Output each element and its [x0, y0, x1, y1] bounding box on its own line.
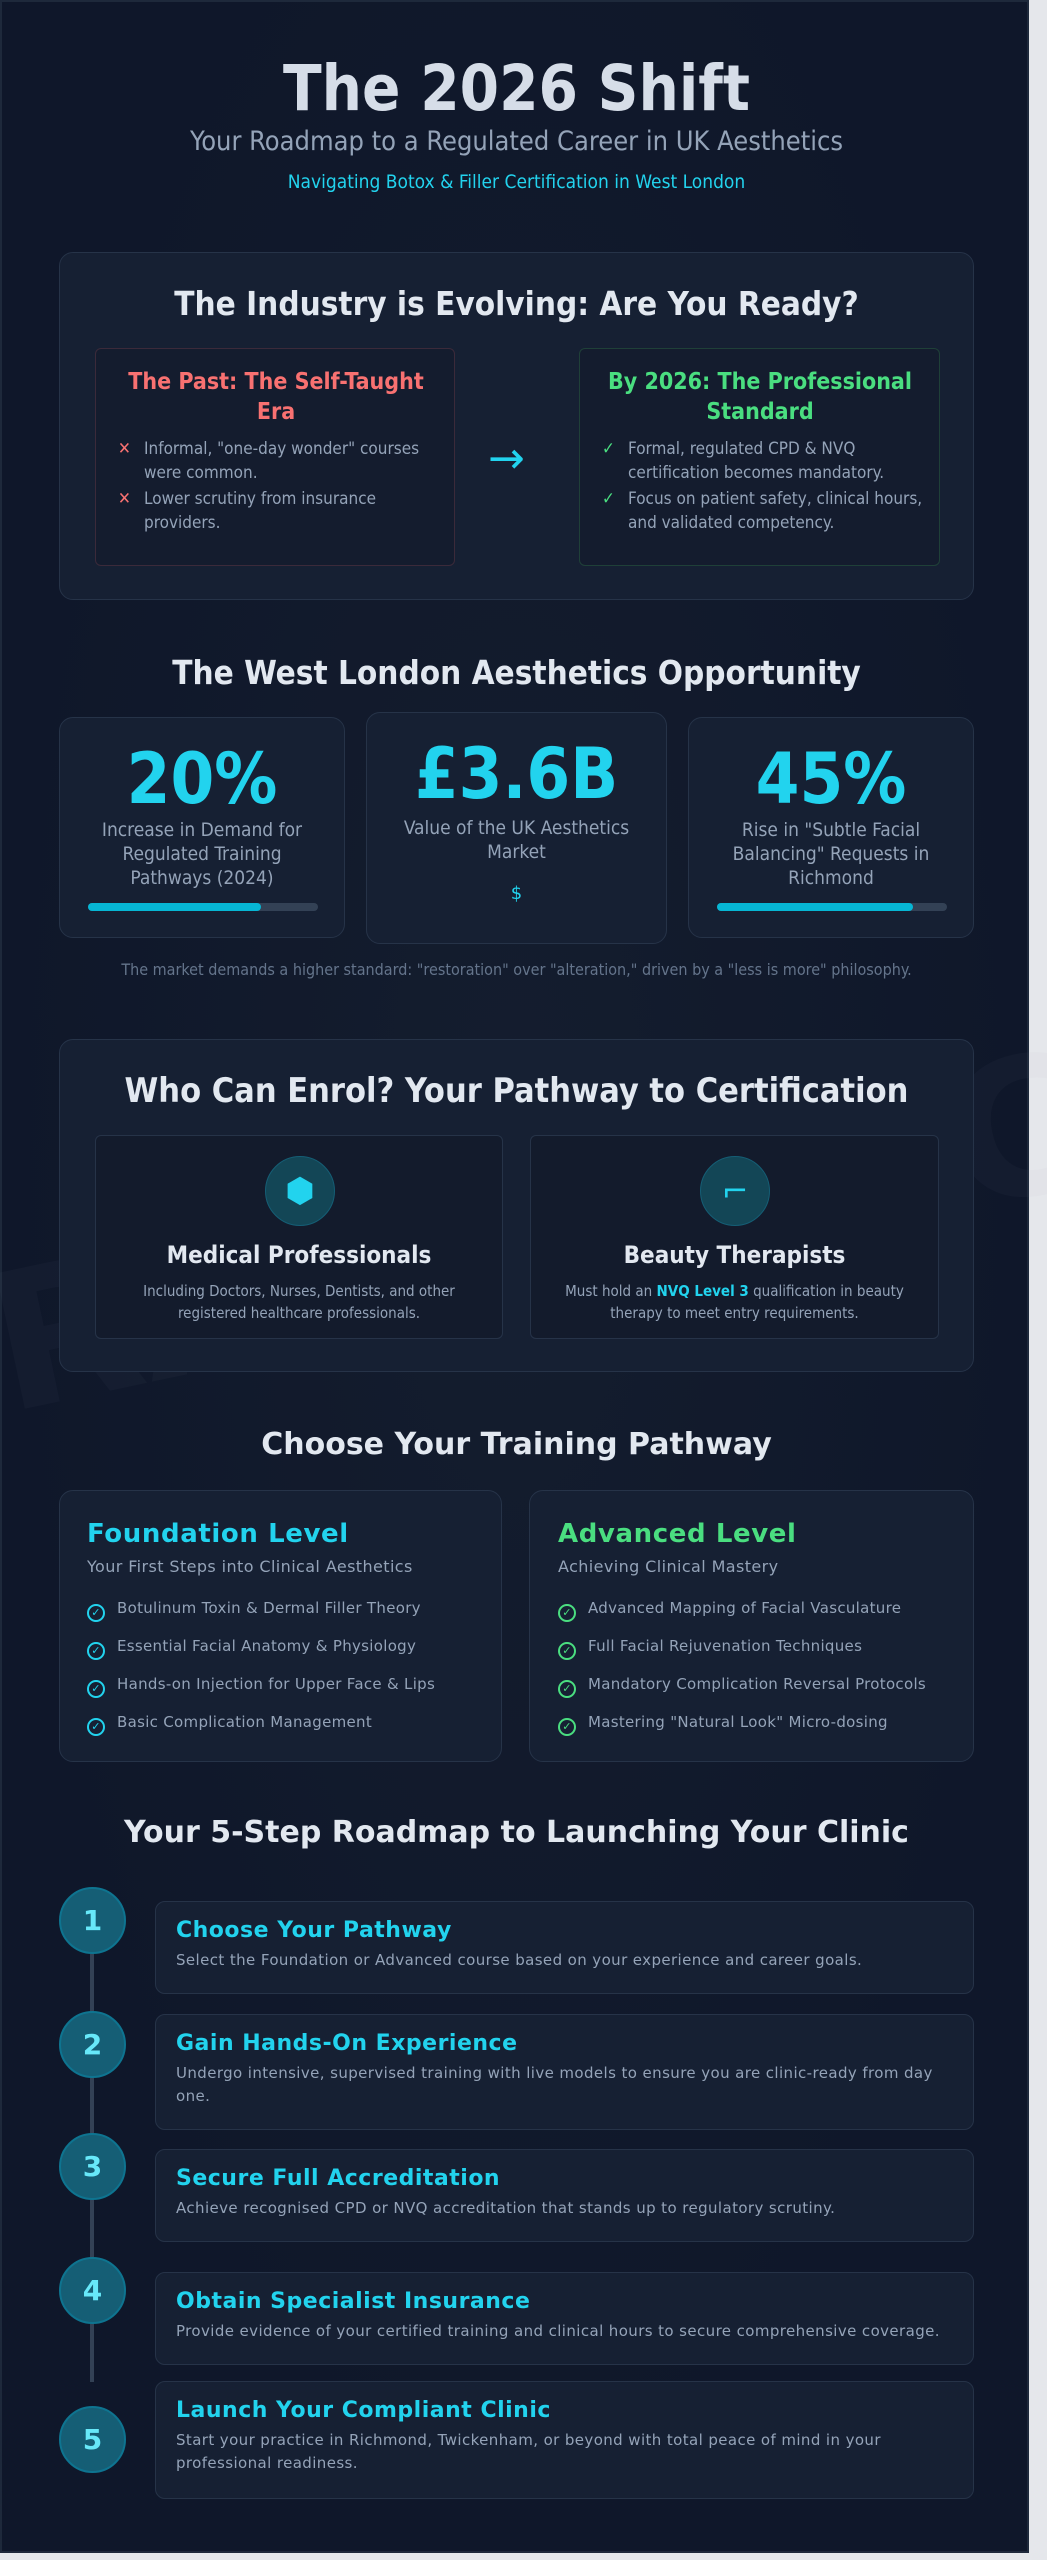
2026 box: Formal, regulated CPD & NVQ certification becomes mandatory. — [628, 439, 884, 483]
text: Gain Hands-On Experience — [176, 2031, 518, 2056]
card advanced: Full Facial Rejuvenation Techniques — [588, 1637, 862, 1655]
stat card 45%: Rise in "Subtle Facial Balancing" Requests in Richmond — [733, 819, 929, 889]
title: The 2026 Shift — [283, 52, 750, 125]
icon: ⬢ — [285, 1171, 315, 1211]
card advanced: Achieving Clinical Mastery — [558, 1557, 778, 1576]
card foundation: ✓ — [91, 1606, 101, 1619]
step 4 — [59, 2257, 126, 2324]
card foundation: ✓ — [91, 1682, 101, 1695]
panel: who can enrol — [59, 1039, 974, 1372]
text: Undergo intensive, supervised training with live models to ensure you are clinic-ready from day one. — [176, 2064, 933, 2105]
2026 box — [579, 348, 940, 566]
panel: industry evolving — [59, 252, 974, 600]
card advanced: ✓ — [562, 1606, 572, 1619]
heading: The Industry is Evolving: Are You Ready? — [174, 284, 859, 323]
past box: ✕ — [118, 489, 131, 509]
step 3: 3 — [83, 2150, 102, 2183]
2026 box: ✓ — [602, 439, 615, 459]
stat card 20% — [59, 717, 345, 938]
card advanced: Mandatory Complication Reversal Protocols — [588, 1675, 926, 1693]
icon — [265, 1156, 335, 1226]
arrow: → — [488, 433, 525, 484]
heading: roadmap: Your 5-Step Roadmap to Launching Your Clinic — [124, 1815, 909, 1850]
icon: ⌐ — [722, 1172, 748, 1210]
card advanced: Mastering "Natural Look" Micro-dosing — [588, 1713, 888, 1731]
card foundation: Botulinum Toxin & Dermal Filler Theory — [117, 1599, 421, 1617]
card medical: Including Doctors, Nurses, Dentists, and other registered healthcare professionals. — [143, 1282, 455, 1322]
step 2 — [59, 2011, 126, 2078]
subtitle: Your Roadmap to a Regulated Career in UK Aesthetics — [190, 126, 843, 157]
card medical — [95, 1135, 503, 1339]
step 1 — [59, 1887, 126, 1954]
card foundation: ✓ — [91, 1644, 101, 1657]
stat card 3.6B: Value of the UK Aesthetics Market — [404, 817, 629, 863]
icon: dollar: $ — [511, 883, 522, 904]
heading: pathway: Choose Your Training Pathway — [261, 1427, 772, 1462]
stat card 20%: Increase in Demand for Regulated Training Pathways (2024) — [102, 819, 302, 889]
past box: The Past: The Self-Taught Era — [128, 369, 424, 425]
past box: Informal, "one-day wonder" courses were common. — [144, 439, 419, 483]
step 3 — [59, 2133, 126, 2200]
2026 box: ✓ — [602, 489, 615, 509]
tagline: Navigating Botox & Filler Certification in West London — [288, 171, 745, 193]
heading: Who Can Enrol? Your Pathway to Certification — [125, 1071, 908, 1111]
card beauty — [530, 1135, 939, 1339]
step 4: 4 — [83, 2274, 102, 2307]
step 1: 1 — [83, 1904, 102, 1937]
text: Choose Your Pathway — [176, 1918, 452, 1943]
card beauty: Must hold an NVQ Level 3 qualification in beauty therapy to meet entry requirements. — [565, 1282, 904, 1322]
text: Select the Foundation or Advanced course based on your experience and career goals. — [176, 1951, 862, 1969]
text: Secure Full Accreditation — [176, 2166, 500, 2191]
text: Provide evidence of your certified training and clinical hours to secure comprehensive coverage. — [176, 2322, 940, 2340]
card foundation — [59, 1490, 502, 1762]
stat card 3.6B: £3.6B — [415, 733, 618, 815]
heading: opportunity: The West London Aesthetics Opportunity — [172, 653, 861, 692]
text: Obtain Specialist Insurance — [176, 2289, 530, 2314]
text: Launch Your Compliant Clinic — [176, 2398, 551, 2423]
card foundation: Essential Facial Anatomy & Physiology — [117, 1637, 416, 1655]
timeline line — [90, 1922, 94, 2382]
card advanced: ✓ — [562, 1644, 572, 1657]
note: The market demands a higher standard: "restoration" over "alteration," driven by a "less is more" philosophy. — [121, 960, 912, 979]
stat card 20%: 20% — [127, 738, 277, 820]
card foundation: ✓ — [91, 1720, 101, 1733]
stat card 45%: 45% — [756, 738, 906, 820]
2026 box: By 2026: The Professional Standard — [608, 369, 912, 425]
card foundation: Foundation Level — [87, 1519, 349, 1549]
past box — [95, 348, 455, 566]
stat card 3.6B — [366, 712, 667, 944]
card advanced: Advanced Mapping of Facial Vasculature — [588, 1599, 901, 1617]
card advanced: ✓ — [562, 1682, 572, 1695]
card beauty: Beauty Therapists — [624, 1241, 845, 1269]
text: Start your practice in Richmond, Twickenham, or beyond with total peace of mind in your professional readiness. — [176, 2431, 881, 2472]
card advanced: ✓ — [562, 1720, 572, 1733]
card advanced: Advanced Level — [558, 1519, 797, 1549]
card medical: Medical Professionals — [167, 1241, 431, 1269]
past box: ✕ — [118, 439, 131, 459]
stat card 45% — [688, 717, 974, 938]
card foundation: Your First Steps into Clinical Aesthetics — [87, 1557, 413, 1576]
card foundation: Basic Complication Management — [117, 1713, 372, 1731]
past box: Lower scrutiny from insurance providers. — [144, 489, 376, 533]
card foundation: Hands-on Injection for Upper Face & Lips — [117, 1675, 435, 1693]
2026 box: Focus on patient safety, clinical hours, and validated competency. — [628, 489, 922, 533]
icon — [700, 1156, 770, 1226]
text: Achieve recognised CPD or NVQ accreditation that stands up to regulatory scrutiny. — [176, 2199, 835, 2217]
step 5 — [59, 2406, 126, 2473]
card advanced — [529, 1490, 974, 1762]
step 2: 2 — [83, 2028, 102, 2061]
step 5: 5 — [83, 2423, 102, 2456]
